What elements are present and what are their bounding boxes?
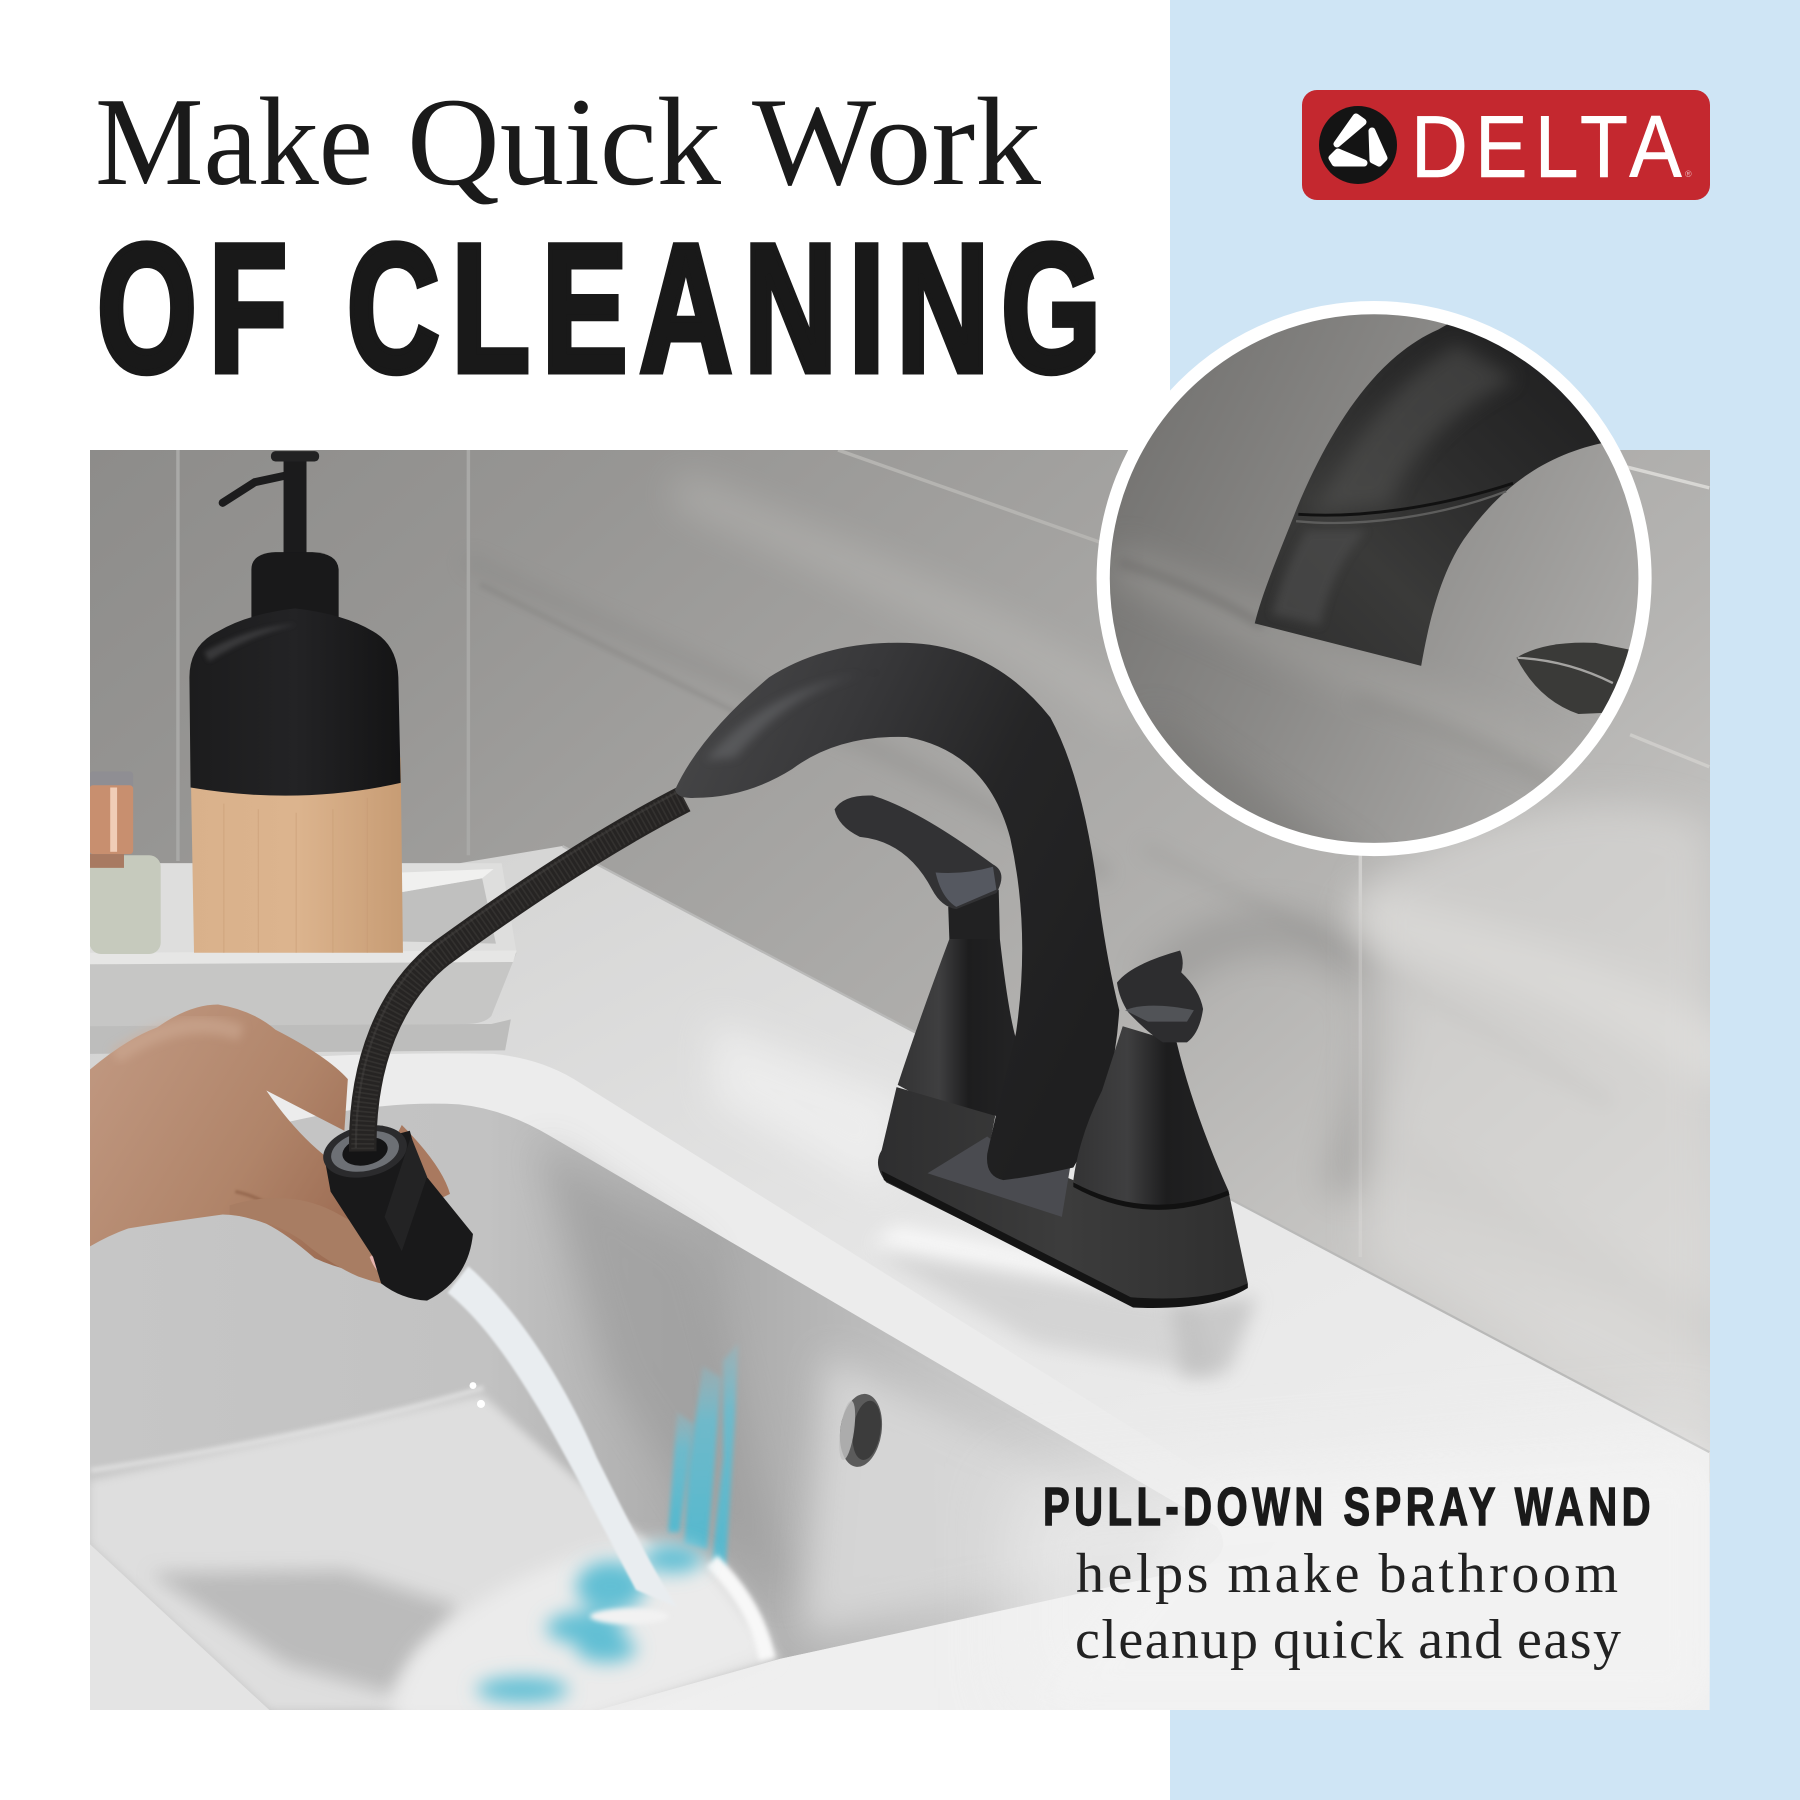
wand body — [324, 1131, 473, 1301]
pump stem — [284, 462, 306, 552]
water sparkle — [470, 1382, 476, 1389]
title: Make Quick Work: Work — [752, 73, 1041, 212]
hand holding wand: rear fingers — [390, 1125, 450, 1205]
deck plate — [878, 1087, 1248, 1306]
left handle lever — [835, 795, 1001, 909]
braided hose — [356, 792, 684, 1151]
faucet shadow on wall — [1154, 931, 1383, 1194]
front rim — [736, 1580, 1142, 1672]
blue soap and foam — [390, 1343, 771, 1722]
shadow on basin floor — [149, 1570, 459, 1693]
bottle black upper — [189, 608, 401, 796]
left handle neck — [948, 890, 1000, 939]
wand collar ring — [318, 1118, 412, 1185]
fingernail — [370, 1247, 434, 1288]
main faucet — [675, 643, 1248, 1308]
sink basin — [90, 1054, 1185, 1710]
thumb — [230, 1198, 434, 1290]
title: Make Quick Work — [95, 73, 1041, 212]
drain overflow — [840, 1394, 882, 1467]
foam — [390, 1542, 771, 1722]
inset white ring — [1103, 308, 1645, 849]
tiled wall — [90, 450, 1710, 1483]
right deck plate band — [1073, 1182, 1229, 1210]
bottle wood lower — [191, 758, 403, 953]
bottom-left rim — [90, 1544, 270, 1710]
title: OF CLEANING: OF CLEANING — [97, 206, 1113, 410]
countertop — [90, 845, 1710, 1503]
soap tray — [90, 863, 517, 1026]
water stream — [448, 1266, 677, 1607]
registered mark: ® — [1685, 169, 1692, 179]
soft fade behind caption — [1010, 1423, 1709, 1710]
sink rim — [266, 1054, 830, 1270]
caption body line 1: helps make bathroom — [1076, 1543, 1618, 1605]
basin dark wall shade — [548, 1141, 766, 1552]
bottle neck — [251, 552, 339, 618]
hand — [90, 1004, 434, 1290]
pump cap — [271, 451, 319, 461]
red badge — [1302, 90, 1710, 200]
pump nozzle — [223, 475, 287, 503]
title: Make Quick Work: Quick — [407, 73, 721, 212]
blue streaks on basin wall — [668, 1343, 738, 1570]
caption body line 2: cleanup quick and easy — [1075, 1609, 1621, 1671]
inset circle fill — [1103, 308, 1645, 849]
caption — [1043, 1477, 1655, 1671]
white overlay on counter near text — [1033, 1458, 1709, 1710]
title: Make Quick Work: Make — [95, 73, 373, 212]
logo: Delta badge — [1302, 90, 1710, 200]
photo: bathroom sink scene — [90, 450, 1710, 1722]
blue patches — [476, 1545, 703, 1702]
soap dispenser — [189, 451, 403, 953]
right handle cone — [1073, 1026, 1228, 1209]
left handle cone — [898, 939, 1016, 1116]
spout seam — [1298, 483, 1513, 515]
spout arch — [675, 643, 1119, 1180]
basin interior — [90, 1104, 1223, 1710]
blue background panel — [1170, 0, 1800, 1800]
icon: Delta triangle mark — [1319, 106, 1397, 184]
reflected lighter shape on wall — [1355, 800, 1708, 1336]
small glass bottle with copper cap — [90, 771, 161, 954]
inset content — [1114, 298, 1642, 872]
handle tip — [1516, 643, 1642, 714]
spray wand — [318, 1118, 473, 1301]
spout tip — [1255, 298, 1630, 666]
inset: spout close-up — [1103, 298, 1645, 872]
logo wordmark: DELTA — [1411, 97, 1689, 196]
right handle knob — [1117, 951, 1203, 1042]
basin floor — [90, 1395, 781, 1710]
